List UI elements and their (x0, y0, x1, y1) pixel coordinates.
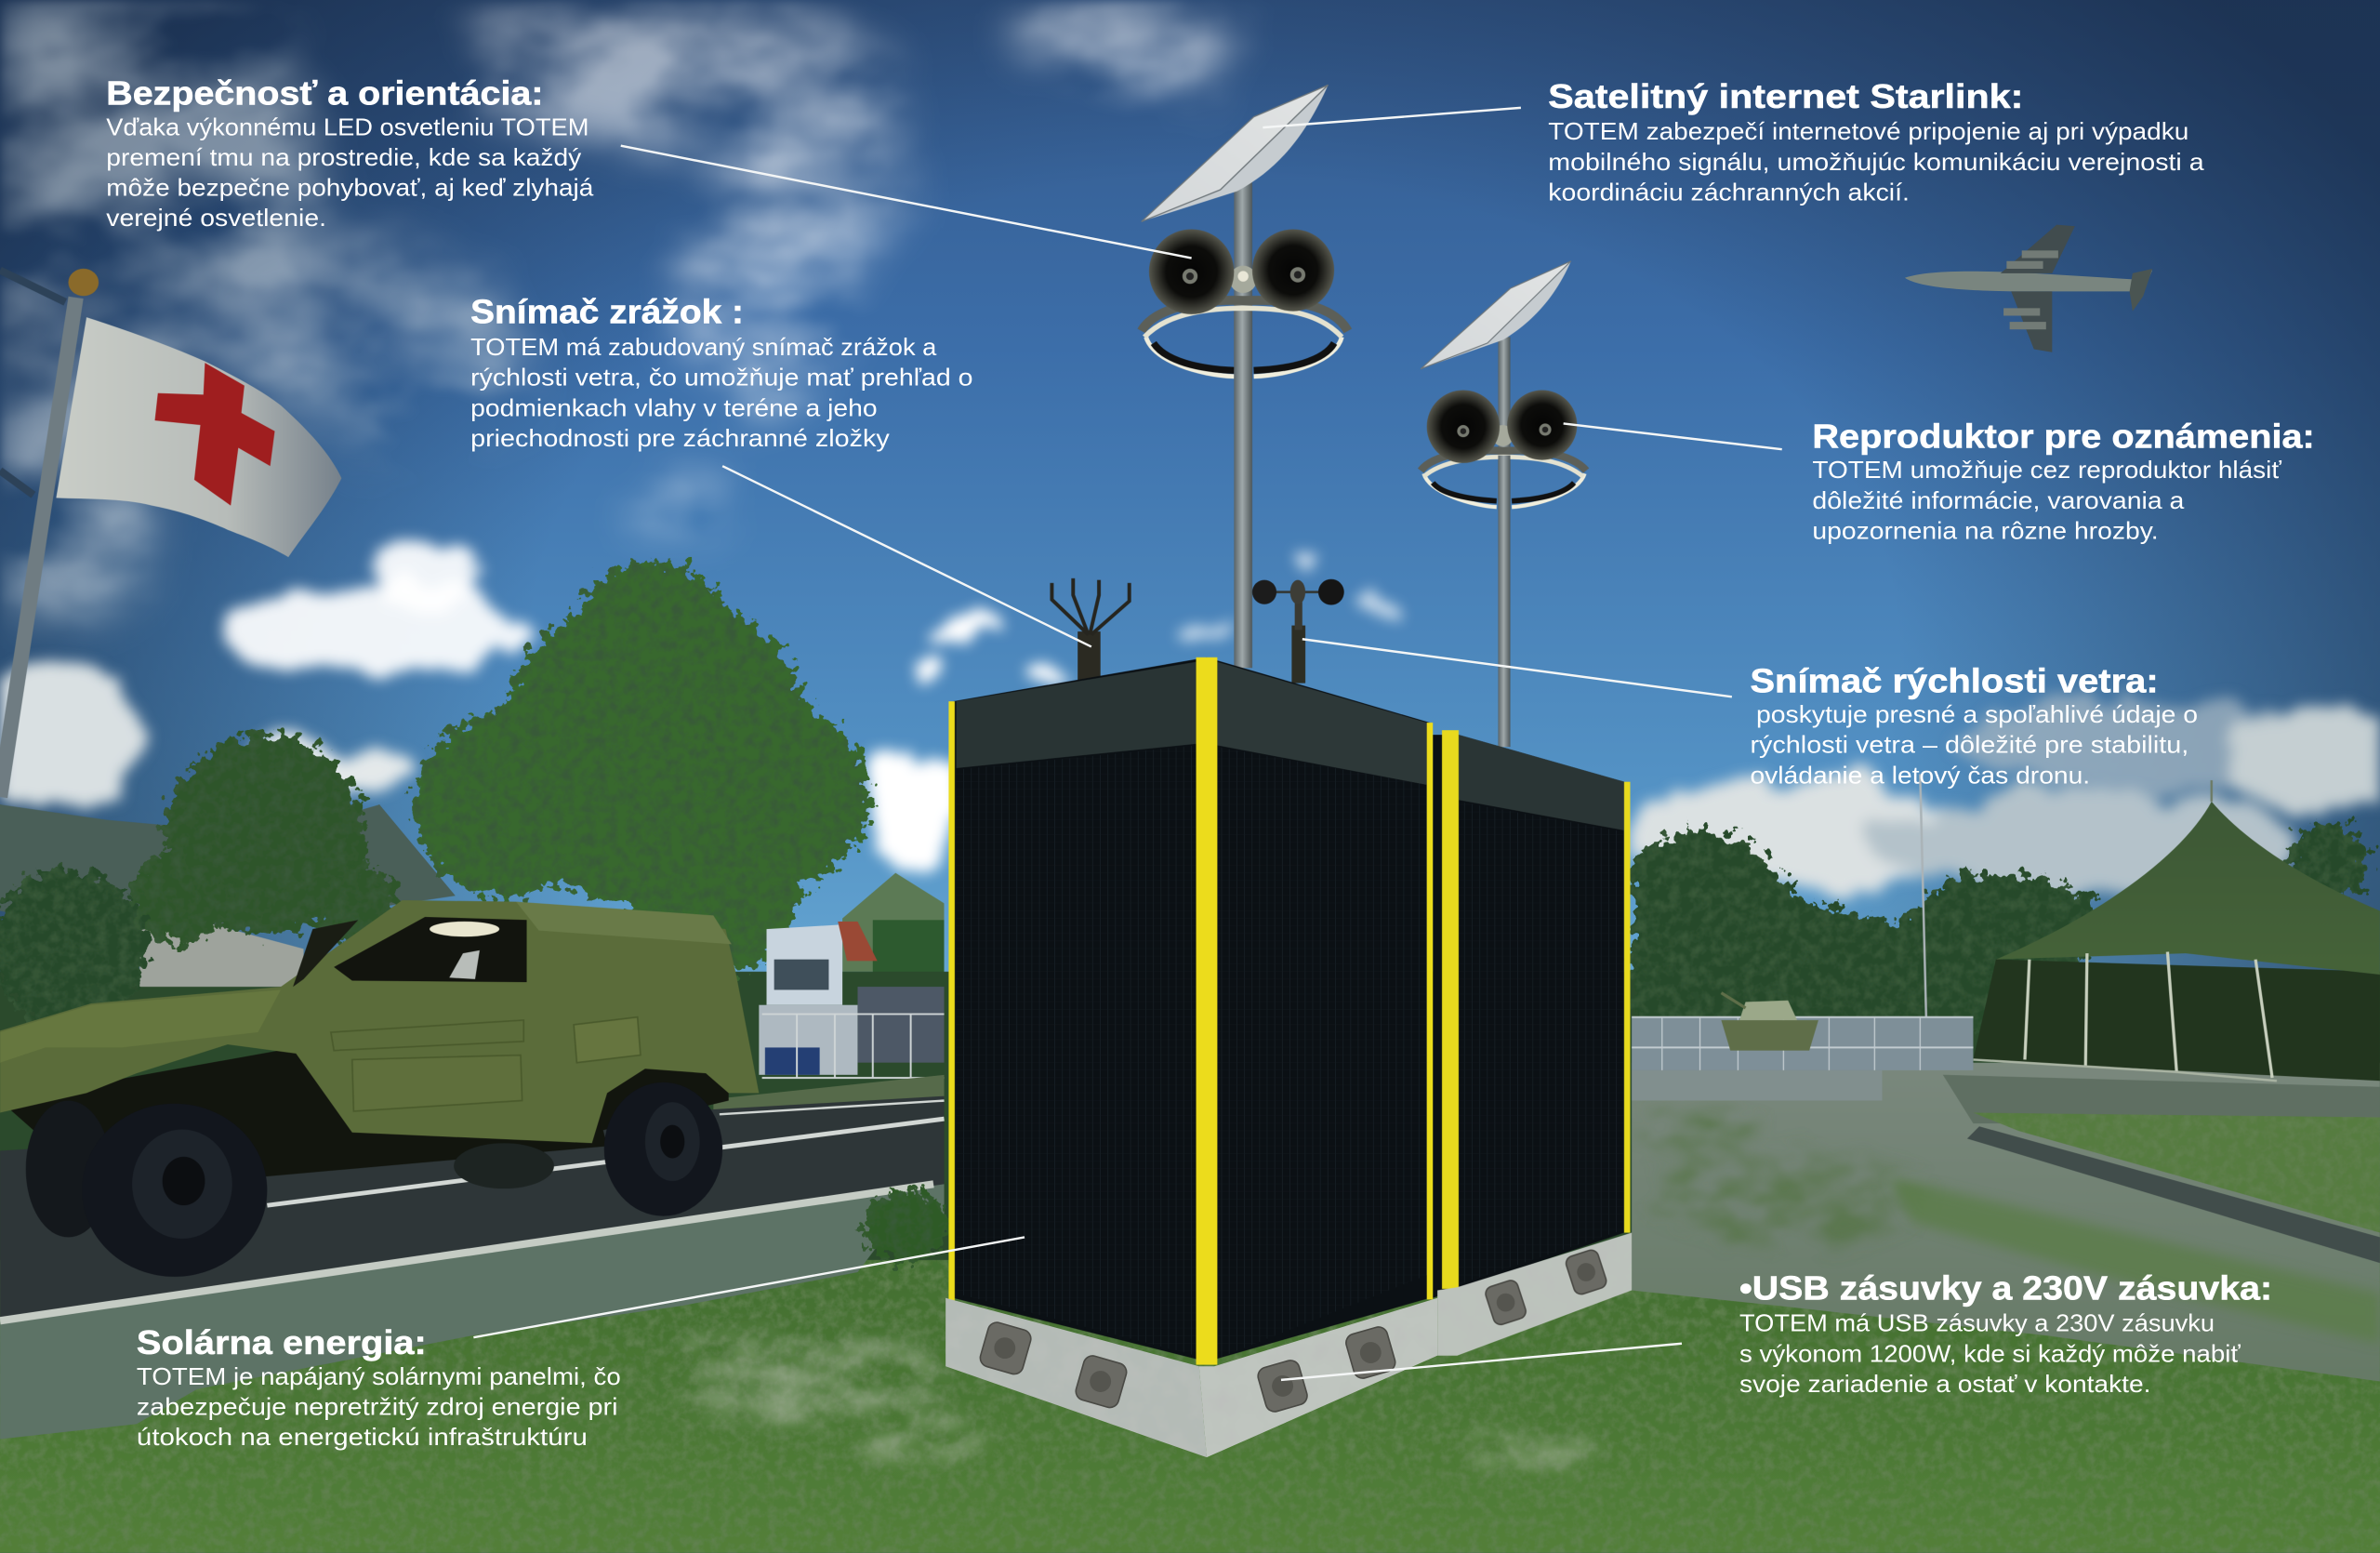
right ground (1632, 1063, 2380, 1382)
icon: starlink dish (1421, 261, 1571, 369)
totem poles (1234, 182, 1510, 747)
totem unit 2 (1433, 730, 1632, 1356)
callout: USB zásuvky a 230V zásuvka: TOTEM má USB zásuvky a 230V zásuvku (1739, 1309, 2215, 1337)
tent (1973, 780, 2380, 1081)
clouds (0, 0, 2380, 897)
callout: Satelitný internet Starlink: Satelitný internet Starlink: (1548, 77, 2023, 115)
callout: Satelitný internet Starlink: TOTEM zabezpečí internetové pripojenie aj pri výpadku (1548, 117, 2188, 145)
callout: Snímač rýchlosti vetra: Snímač rýchlosti vetra: (1750, 661, 2159, 699)
front wheel (26, 1101, 267, 1277)
callout: Snímač zrážok: priechodnosti pre záchranné zložky (470, 424, 890, 452)
callout: Snímač rýchlosti vetra: ovládanie a letový čas dronu. (1750, 761, 2090, 789)
callout: Snímač rýchlosti vetra: poskytuje presné a spoľahlivé údaje o (1756, 700, 2198, 728)
callout: USB zásuvky a 230V zásuvka: s výkonom 1200W, kde si každý môže nabiť (1739, 1339, 2241, 1367)
sidewalk (0, 1184, 945, 1440)
totem 2 top equipment (1421, 261, 1586, 511)
callout: Solárna energia: zabezpečuje nepretržitý zdroj energie pri (137, 1392, 617, 1420)
lamp post far (1920, 775, 1926, 1017)
callout: Reproduktor pre oznámenia: dôležité informácie, varovania a (1812, 486, 2185, 514)
sky background (0, 0, 2380, 1154)
totem 1 top equipment (1142, 85, 1348, 379)
callout: Snímač zrážok (470, 293, 973, 452)
icon: starlink dish (1142, 85, 1329, 221)
callout: Bezpečnosť a orientácia: premení tmu na prostredie, kde sa každý (106, 143, 581, 171)
header panel (1459, 735, 1624, 830)
callout: Satelitný internet Starlink: koordináciu záchranných akcií. (1548, 178, 1910, 206)
undercarriage (0, 1047, 607, 1181)
callout: Snímač rýchlosti vetra: rýchlosti vetra – dôležité pre stabilitu, (1750, 731, 2188, 759)
callout: Bezpečnosť a orientácia: verejné osvetlenie. (106, 204, 326, 232)
ground backing (0, 972, 2380, 1306)
callout: Reproduktor pre oznámenia: Reproduktor pre oznámenia: (1812, 418, 2315, 456)
solar panel right (1217, 747, 1427, 1359)
sockets (978, 1321, 1397, 1414)
callout: Bezpečnosť a orientácia: môže bezpečne pohybovať, aj keď zlyhajá (106, 174, 594, 202)
road (0, 1096, 945, 1323)
grass base (0, 1260, 2380, 1553)
callout: Bezpečnosť a orientácia: Vďaka výkonnému LED osvetleniu TOTEM (106, 113, 588, 140)
solar panel left (957, 746, 1197, 1356)
concrete wall between trees (139, 905, 304, 987)
callout: Reproduktor pre oznámenia (1812, 418, 2315, 545)
callout: Solárna energia: TOTEM je napájaný solárnymi panelmi, čo (137, 1362, 621, 1390)
callout: USB zásuvky a 230V zásuvka (1739, 1268, 2272, 1398)
flag with red cross (0, 269, 341, 797)
header panel left (957, 662, 1197, 768)
callout: Reproduktor pre oznámenia: TOTEM umožňuje cez reproduktor hlásiť (1812, 456, 2281, 484)
callout: Snímač zrážok: TOTEM má zabudovaný snímač zrážok a (470, 333, 937, 361)
left trees (0, 562, 870, 1028)
fence and tank (1632, 993, 1973, 1101)
bush beside the totem (864, 1190, 948, 1263)
callout: Satelitný internet Starlink: mobilného signálu, umožňujúc komunikáciu verejnosti a (1548, 148, 2204, 176)
sockets (1484, 1248, 1608, 1326)
leader lines (473, 108, 1782, 1380)
aircraft (1905, 225, 2152, 352)
military vehicle (0, 900, 759, 1277)
callout: USB zásuvky a 230V zásuvka: svoje zariadenie a ostať v kontakte. (1739, 1370, 2150, 1398)
callout: Solárna energia (137, 1323, 621, 1451)
rain sensor (1051, 578, 1130, 680)
callout: Reproduktor pre oznámenia: upozornenia na rôzne hrozby. (1812, 517, 2159, 545)
callout: Satelitný internet Starlink (1548, 77, 2204, 206)
totem unit 1 (945, 657, 1437, 1457)
callout: Solárna energia: útokoch na energetickú infraštruktúru (137, 1423, 588, 1451)
callout: Snímač zrážok: Snímač zrážok : (470, 293, 744, 331)
rear wheel (604, 1082, 722, 1216)
far wheel (454, 1143, 554, 1188)
callout: Bezpečnosť a orientácia (106, 74, 594, 232)
icon: tank (1721, 993, 1818, 1051)
solar panel (1459, 802, 1624, 1284)
callout: Snímač zrážok: rýchlosti vetra, čo umožňuje mať prehľad o (470, 364, 973, 392)
wet patches in grass (668, 1321, 1601, 1472)
callout: Bezpečnosť a orientácia: Bezpečnosť a orientácia: (106, 74, 543, 113)
yellow frame (948, 657, 1433, 1365)
callout: Snímač zrážok: podmienkach vlahy v teréne a jeho (470, 393, 878, 421)
callout: USB zásuvky a 230V zásuvka: •USB zásuvky a 230V zásuvka: (1739, 1268, 2272, 1307)
header panel right (1217, 662, 1427, 785)
icon: speakers (1427, 391, 1577, 463)
background hills (0, 804, 945, 979)
callout: Snímač rýchlosti vetra (1750, 661, 2198, 789)
concrete base (945, 1298, 1437, 1457)
hull (0, 900, 759, 1143)
right tree line (1632, 823, 2370, 1032)
window (334, 917, 527, 982)
callout: Solárna energia: Solárna energia: (137, 1323, 427, 1361)
wind sensor (1252, 579, 1344, 684)
yellow frame (1442, 730, 1630, 1289)
concrete base (1437, 1233, 1632, 1356)
icon: LED ring (1421, 450, 1586, 507)
icon: LED ring (1142, 300, 1348, 377)
building and fence behind road (713, 922, 945, 1121)
icon: speakers (1149, 230, 1334, 314)
